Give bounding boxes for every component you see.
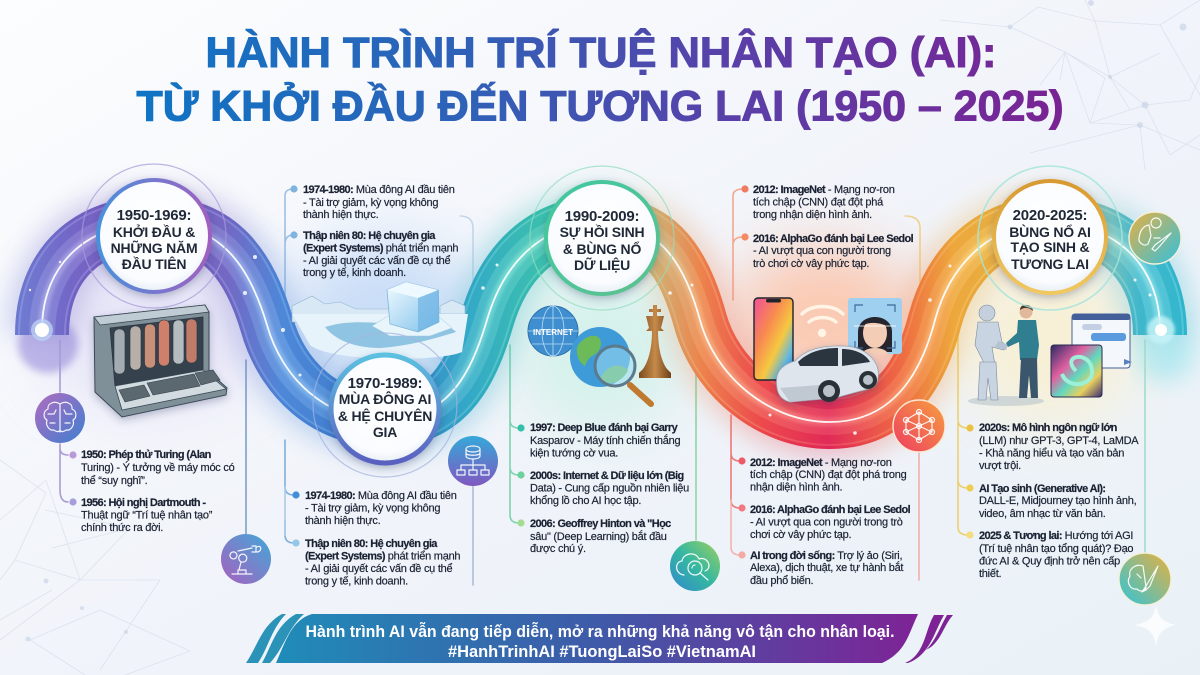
icon: neural network — [893, 400, 945, 452]
era circle: 1970-1989: 1970-1989: — [348, 375, 422, 392]
era circle: 1950-1969: NHỮNG NĂM — [111, 239, 197, 256]
text block: data revival: 2000s: Internet & Dữ liệu lớn (Big — [530, 470, 684, 482]
title: TỪ KHỞI ĐẦU ĐẾN TƯƠNG LAI (1950 – 2025) — [136, 82, 1064, 130]
illustration: generative art — [1051, 345, 1102, 397]
era circle: 2020-2025: BÙNG NỔ AI — [1009, 223, 1091, 240]
icon: cloud search — [670, 541, 720, 591]
era circle: 1950-1969: ĐẦU TIÊN — [122, 255, 186, 272]
text block: deep learning bottom: 2012: ImageNet - Mạng nơ-ron — [750, 457, 892, 469]
text block: deep learning top: 2012: ImageNet - Mạng nơ-ron — [753, 184, 895, 196]
title: HÀNH TRÌNH TRÍ TUỆ NHÂN TẠO (AI): — [206, 28, 996, 77]
text block: deep learning bottom: - AI vượt qua con người trong trò — [750, 516, 903, 528]
closing banner: #HanhTrinhAI #TuongLaiSo #VietnamAI — [448, 643, 756, 661]
text block: generative AI: (LLM) như GPT-3, GPT-4, LaMDA — [979, 435, 1139, 447]
closing banner — [246, 614, 953, 663]
text block: AI winter bottom: Thập niên 80: Hệ chuyên gia — [305, 538, 438, 550]
era circle: 2020-2025: 2020-2025: — [1013, 207, 1087, 224]
end node — [1147, 316, 1175, 344]
title — [136, 28, 1064, 130]
closing banner: Hành trình AI vẫn đang tiếp diễn, mở ra những khả năng vô tận cho nhân loại. — [306, 622, 894, 641]
text block: 1950s milestones: 1950: Phép thử Turing (Alan — [81, 449, 212, 461]
era circle: 1970-1989 — [313, 333, 457, 477]
text block: AI winter top: 1974-1980: Mùa đông AI đầu tiên — [303, 184, 455, 196]
text block: generative AI: AI Tạo sinh (Generative AI): — [979, 483, 1105, 495]
era circle: 2020-2025: TƯƠNG LAI — [1011, 256, 1089, 272]
text block: deep learning bottom: tích chập (CNN) đạt đột phá trong — [750, 469, 907, 481]
text block: AI winter top: thành hiện thực. — [303, 209, 379, 221]
era circle: 1990-2009 — [530, 166, 674, 310]
text block: generative AI: đức AI & Quy định trở nên cấp — [979, 556, 1120, 568]
decorative sparkle — [1135, 605, 1176, 647]
text block: generative AI: DALL-E, Midjourney tạo hình ảnh, — [979, 495, 1137, 507]
text block: 1950s milestones: thể “suy nghĩ”. — [81, 475, 148, 487]
icon: brain — [35, 393, 85, 443]
text block: AI winter bottom: - Tài trợ giảm, kỳ vọng không — [305, 502, 440, 514]
illustration: vintage vacuum tube computer — [94, 305, 227, 417]
text block: AI winter bottom: thành hiện thực. — [305, 515, 381, 527]
icon: creative AI — [1119, 553, 1171, 605]
text block: 1950s milestones: 1956: Hội nghị Dartmouth - — [81, 497, 206, 509]
text block: deep learning bottom: AI trong đời sống: Trợ lý ảo (Siri, — [750, 550, 902, 562]
text block: generative AI: video, âm nhạc từ văn bản. — [979, 508, 1106, 520]
era circle: 1970-1989: GIA — [373, 424, 397, 440]
illustration: internet globe: INTERNET — [533, 328, 573, 337]
illustration: smartphone — [754, 298, 793, 380]
text block: data revival: khổng lồ cho AI học tập. — [530, 495, 641, 507]
text block: data revival: Data) - Cung cấp nguồn nhiên liệu — [530, 482, 689, 494]
text block: data revival: 1997: Deep Blue đánh bại Garry — [530, 422, 679, 434]
text block: data revival: Kasparov - Máy tính chiến thắng — [530, 434, 680, 447]
text block: data revival: 2006: Geoffrey Hinton và "Học — [530, 518, 671, 530]
text block: generative AI: (Trí tuệ nhân tạo tổng quát)? Đạo — [979, 543, 1133, 555]
illustration: internet globe — [528, 306, 578, 356]
text block: AI winter bottom: (Expert Systems) phát triển mạnh — [305, 550, 460, 562]
text block: deep learning bottom: 2016: AlphaGo đánh bại Lee Sedol — [750, 504, 911, 516]
text block: generative AI: thiết. — [979, 568, 1001, 580]
illustration: robot and human handshake — [968, 305, 1044, 406]
text block: deep learning top: 2016: AlphaGo đánh bại Lee Sedol — [753, 233, 914, 245]
illustration: face recognition — [848, 298, 902, 354]
text block: generative AI: vượt trội. — [979, 460, 1021, 472]
text block: deep learning bottom: nhận diện hình ảnh. — [750, 482, 843, 494]
ribbon timeline — [42, 223, 1160, 422]
text block: 1950s milestones: Thuật ngữ “Trí tuệ nhân tạo” — [81, 510, 213, 522]
text block: deep learning bottom: đầu phổ biến. — [750, 575, 813, 587]
text block: AI winter top: - Tài trợ giảm, kỳ vọng không — [303, 197, 438, 209]
timeline dots — [69, 185, 974, 559]
illustration: ice landscape — [292, 282, 468, 359]
text block: 1950s milestones: chính thức ra đời. — [81, 522, 163, 534]
era circle: 1990-2009: SỰ HỒI SINH — [560, 223, 645, 240]
text block: deep learning top: tích chập (CNN) đạt đột phá — [753, 196, 884, 208]
text block: generative AI: - Khả năng hiểu và tạo văn bản — [979, 448, 1124, 460]
era circle: 1990-2009: 1990-2009: — [565, 208, 639, 225]
text block: AI winter bottom: - AI giải quyết các vấn đề cụ thể — [305, 563, 452, 575]
text block: deep learning bottom: chơi cờ vây phức tạp. — [750, 529, 852, 541]
text block: AI winter top: Thập niên 80: Hệ chuyên gia — [303, 230, 436, 242]
text block: generative AI: 2025 & Tương lai: Hướng tới AGI — [979, 530, 1133, 542]
era circle: 1950-1969: KHỞI ĐẦU & — [113, 223, 195, 240]
illustration: AI chat window — [1072, 314, 1132, 368]
icon: data hierarchy — [448, 436, 498, 486]
text block: AI winter bottom: 1974-1980: Mùa đông AI đầu tiên — [305, 490, 457, 502]
text block: generative AI: 2020s: Mô hình ngôn ngữ lớn — [979, 422, 1118, 434]
illustration: earth and magnifier — [570, 327, 651, 404]
connector lines — [60, 189, 1145, 585]
text block: data revival: sâu" (Deep Learning) bắt đầu — [530, 530, 667, 543]
era circle: 1970-1989: MÙA ĐÔNG AI — [339, 390, 431, 407]
text block: 1950s milestones: Turing) - Ý tưởng về máy móc có — [81, 461, 235, 474]
era circle: 1990-2009: DỮ LIỆU — [574, 256, 630, 273]
era circle: 1950-1969: 1950-1969: — [117, 207, 191, 224]
text block: deep learning top: - AI vượt qua con người trong — [753, 245, 891, 257]
start node — [31, 319, 53, 341]
text block: deep learning top: trò chơi cờ vây phức tạp. — [753, 258, 869, 270]
illustration: self-driving car — [776, 346, 878, 402]
era circle: 1950-1969 — [82, 164, 226, 308]
illustration: chess king — [639, 305, 671, 378]
text block: AI winter top: (Expert Systems) phát triển mạnh — [303, 242, 458, 254]
icon: wifi — [802, 306, 843, 336]
text block: deep learning top: trong nhận diện hình ảnh. — [753, 209, 872, 221]
icon: brain, bulb and brush — [1129, 212, 1181, 264]
text block: AI winter bottom: trong y tế, kinh doanh. — [305, 576, 408, 588]
text block: data revival: kiện tướng cờ vua. — [530, 448, 618, 460]
text block: deep learning bottom: Alexa), dịch thuật, xe tự hành bắt — [750, 561, 903, 574]
icon: robot arm — [221, 534, 271, 584]
era circle: 1970-1989: & HỆ CHUYÊN — [338, 407, 432, 424]
text block: AI winter top: - AI giải quyết các vấn đề cụ thể — [303, 255, 450, 267]
era circle: 2020-2025 — [978, 166, 1122, 310]
era circle: 1990-2009: & BÙNG NỔ — [563, 240, 641, 257]
text block: AI winter top: trong y tế, kinh doanh. — [303, 267, 406, 279]
era circle: 2020-2025: TẠO SINH & — [1011, 239, 1090, 255]
text block: data revival: được chú ý. — [530, 543, 586, 555]
